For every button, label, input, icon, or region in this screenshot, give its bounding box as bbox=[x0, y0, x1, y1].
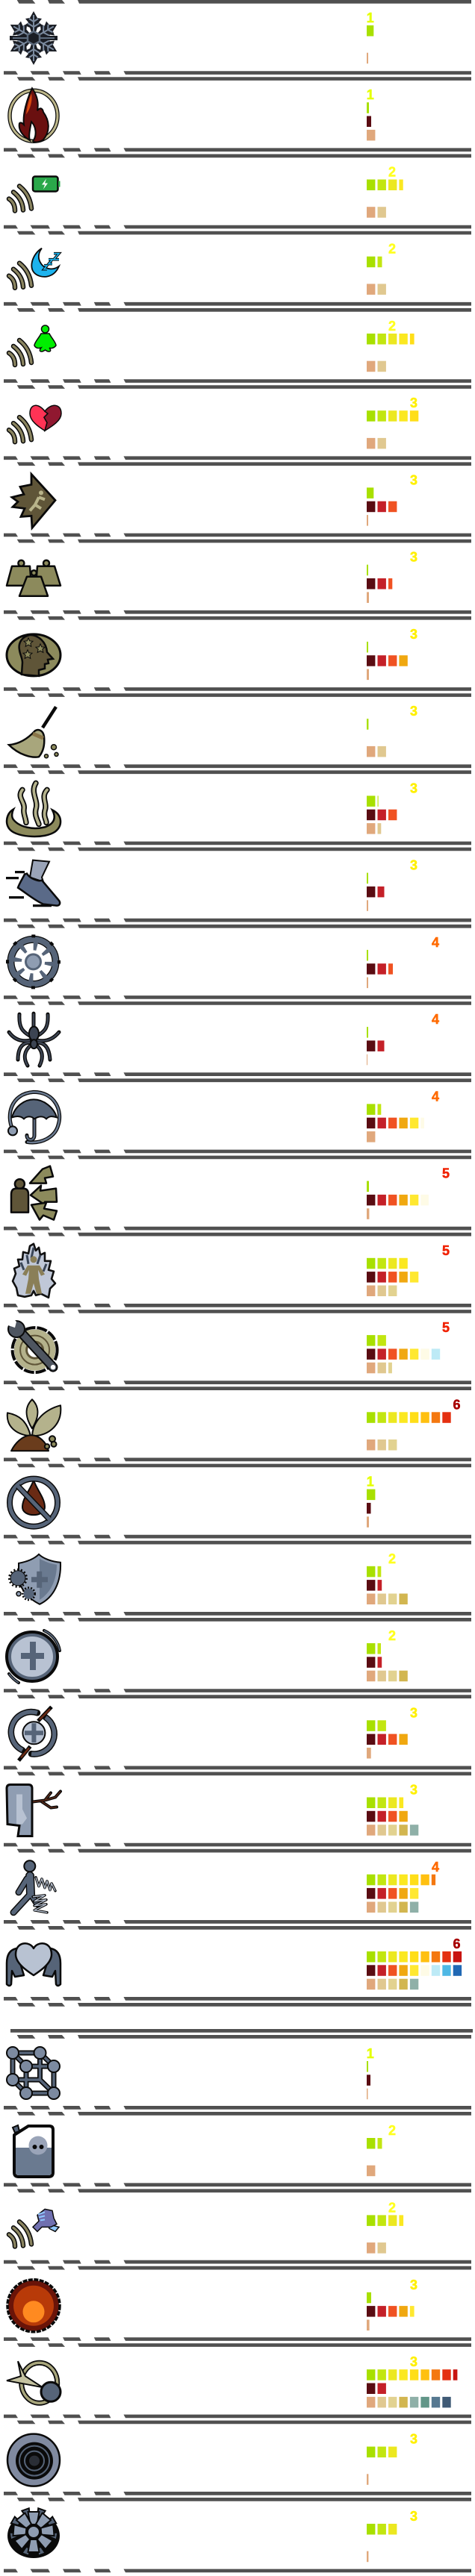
bar: heat bbox=[367, 887, 384, 897]
bar: green bbox=[367, 1104, 381, 1115]
rating number: 3 bbox=[410, 2432, 417, 2447]
bar: green bbox=[367, 1643, 381, 1654]
bar: tan bbox=[367, 1285, 397, 1296]
icon: flame in ring bbox=[10, 88, 58, 143]
row: umbrella bbox=[8, 1089, 439, 1142]
bar: heat bbox=[367, 1272, 418, 1283]
icon: broken heart signal bbox=[9, 405, 61, 442]
bar: green bbox=[367, 1412, 451, 1423]
icon: arrow and orbiting ball bbox=[7, 2361, 60, 2403]
bar: tan bbox=[367, 515, 368, 526]
rating number: 5 bbox=[442, 1320, 450, 1335]
rating number: 1 bbox=[367, 1475, 374, 1489]
row: spider bbox=[9, 1012, 439, 1066]
bar: tan bbox=[367, 2474, 368, 2485]
bar: green bbox=[367, 257, 382, 267]
row: poison can bbox=[13, 2123, 396, 2177]
bar: heat bbox=[367, 2383, 386, 2394]
bar: tan bbox=[367, 1208, 369, 1219]
bar: tan bbox=[367, 900, 368, 911]
bar: green bbox=[367, 2292, 371, 2303]
icon: battery signal bbox=[9, 176, 60, 210]
icon: plus coin bbox=[7, 1631, 60, 1683]
bar: tan bbox=[367, 1825, 418, 1836]
rating number: 6 bbox=[453, 1397, 461, 1412]
rating number: 5 bbox=[442, 1243, 450, 1258]
row: plus coin bbox=[7, 1628, 408, 1683]
bar: green bbox=[367, 873, 368, 884]
row: gear wheel bbox=[7, 935, 439, 988]
bar: green bbox=[367, 719, 368, 730]
bar: heat bbox=[367, 1195, 429, 1205]
bar: heat bbox=[367, 1888, 418, 1899]
icon: meditating figure signal bbox=[9, 325, 56, 365]
bar: green bbox=[367, 179, 403, 190]
icon: leaves on soil bbox=[7, 1399, 60, 1451]
bar: green bbox=[367, 334, 415, 345]
icon: gear wheel bbox=[7, 936, 59, 987]
rating number: 3 bbox=[410, 550, 417, 565]
row: fireball bbox=[7, 2278, 417, 2332]
bar: tan bbox=[367, 1594, 408, 1604]
bar: heat bbox=[367, 1965, 462, 1976]
row: arrow ring bbox=[7, 2354, 457, 2407]
row: flame ring bbox=[10, 87, 375, 143]
rating number: 5 bbox=[442, 1166, 450, 1181]
bar: green bbox=[367, 102, 369, 113]
rating number: 2 bbox=[388, 164, 396, 179]
bar: green bbox=[367, 2215, 403, 2226]
row: ring needle bbox=[11, 1705, 417, 1760]
bar: green bbox=[367, 1489, 375, 1500]
row: steam bbox=[7, 781, 417, 837]
icon: vortex bbox=[7, 2434, 60, 2487]
rating number: 4 bbox=[432, 1089, 439, 1104]
rating number: 1 bbox=[367, 10, 374, 25]
bar: green bbox=[367, 1258, 408, 1269]
icon: steam bowl bbox=[7, 783, 60, 837]
icon: molecular lattice bbox=[7, 2047, 60, 2099]
icon: snowflake bbox=[6, 11, 61, 65]
bar: tan bbox=[367, 1748, 371, 1758]
rating number: 2 bbox=[388, 1551, 396, 1566]
bar: tan bbox=[367, 1979, 418, 1989]
row: vortex bbox=[7, 2432, 417, 2487]
bar: green bbox=[367, 2524, 397, 2534]
icon: shield and germs bbox=[10, 1554, 60, 1604]
bar: heat bbox=[367, 501, 397, 512]
rating number: 3 bbox=[410, 704, 417, 719]
rating number: 1 bbox=[367, 2046, 374, 2061]
bar: heat bbox=[367, 1811, 408, 1822]
row: handshake bbox=[9, 2200, 403, 2254]
bar: tan bbox=[367, 1363, 392, 1373]
bar: tan bbox=[367, 1131, 375, 1142]
bar: green bbox=[367, 410, 418, 422]
rating number: 3 bbox=[410, 1782, 417, 1797]
bar: heat bbox=[367, 1118, 424, 1128]
rating number: 3 bbox=[410, 1705, 417, 1720]
bar: green bbox=[367, 1720, 386, 1731]
bar: heat bbox=[367, 1734, 408, 1745]
bar: tan bbox=[367, 2397, 451, 2407]
bar: heat bbox=[367, 810, 397, 820]
bar: tan bbox=[367, 1671, 408, 1681]
icon: wrench over gear bbox=[6, 1317, 58, 1372]
rating number: 2 bbox=[388, 1628, 396, 1643]
rating number: 3 bbox=[410, 2509, 417, 2524]
bar: green bbox=[367, 1335, 386, 1346]
row: meditation bbox=[9, 319, 415, 372]
bar: tan bbox=[367, 53, 368, 63]
bar: tan bbox=[367, 2551, 368, 2562]
rating number: 4 bbox=[432, 1860, 439, 1875]
row: battery bbox=[9, 164, 403, 218]
rating number: 2 bbox=[388, 2123, 396, 2138]
row: aura bbox=[13, 1243, 450, 1298]
bar: green bbox=[367, 2061, 368, 2072]
bar: green bbox=[367, 565, 368, 575]
bar: green bbox=[367, 487, 373, 498]
rating number: 4 bbox=[432, 1012, 439, 1027]
icon: head with stars bbox=[7, 634, 60, 676]
bar: heat bbox=[367, 578, 392, 590]
icon: cracked mirror bbox=[7, 1785, 60, 1836]
bar: tan bbox=[367, 130, 375, 140]
bar: green bbox=[367, 25, 373, 36]
bar: green bbox=[367, 1951, 462, 1963]
bar: green bbox=[367, 1027, 368, 1038]
row: petal wheel bbox=[7, 2508, 417, 2562]
row: lattice bbox=[7, 2046, 374, 2099]
icon: petal wheel bbox=[7, 2508, 60, 2558]
rating number: 3 bbox=[410, 627, 417, 642]
rating number: 2 bbox=[388, 319, 396, 334]
bar: tan bbox=[367, 1439, 397, 1451]
bar: tan bbox=[367, 207, 386, 218]
rating number: 3 bbox=[410, 2278, 417, 2292]
row: shield bbox=[10, 1551, 408, 1604]
row: no blood bbox=[10, 1475, 375, 1528]
icon: handshake signal bbox=[9, 2209, 59, 2246]
row: running shoe bbox=[6, 858, 417, 911]
bar: green bbox=[367, 642, 368, 652]
bar: heat bbox=[367, 1503, 370, 1513]
rating number: 3 bbox=[410, 781, 417, 795]
bar: tan bbox=[367, 978, 368, 988]
icon: spider bbox=[9, 1013, 59, 1066]
icon: umbrella ring bbox=[8, 1092, 60, 1142]
icon: running burst bbox=[12, 474, 55, 528]
bar: tan bbox=[367, 669, 369, 680]
rating number: 3 bbox=[410, 858, 417, 873]
bar: green bbox=[367, 2138, 382, 2149]
row: spring man bbox=[13, 1860, 439, 1913]
icon: fireball bbox=[7, 2280, 60, 2332]
bar: tan bbox=[367, 746, 386, 757]
bar: tan bbox=[367, 1516, 369, 1528]
bar: heat bbox=[367, 1580, 382, 1591]
icon: broom bbox=[9, 707, 58, 758]
bar: tan bbox=[367, 361, 386, 372]
bar: tan bbox=[367, 592, 369, 603]
bar: tan bbox=[367, 284, 386, 295]
bar: tan bbox=[367, 2242, 386, 2254]
bar: green bbox=[367, 2369, 457, 2380]
bar: heat bbox=[367, 2075, 370, 2086]
icon: pierced ring with plus bbox=[11, 1707, 55, 1760]
icon: running shoe bbox=[6, 860, 60, 906]
rating number: 6 bbox=[453, 1936, 461, 1951]
rating number: 3 bbox=[410, 472, 417, 487]
icon: winged heart bbox=[7, 1943, 60, 1986]
bar: green bbox=[367, 1875, 435, 1885]
bar: tan bbox=[367, 823, 381, 834]
bar: green bbox=[367, 1566, 381, 1577]
rating number: 2 bbox=[388, 2200, 396, 2215]
icon: powered-up aura bbox=[13, 1244, 55, 1298]
bar: tan bbox=[367, 438, 386, 448]
row: deflecting arrows bbox=[11, 1166, 450, 1220]
rating number: 2 bbox=[388, 242, 396, 257]
row: broom bbox=[9, 704, 417, 758]
icon: jerry can with skull bbox=[13, 2125, 53, 2177]
bar: tan bbox=[367, 1901, 418, 1913]
bar: green bbox=[367, 2447, 397, 2457]
row: winged heart bbox=[7, 1936, 462, 1989]
rating number: 3 bbox=[410, 396, 417, 410]
bar: heat bbox=[367, 1657, 382, 1668]
bar: tan bbox=[367, 2319, 370, 2330]
icon: three weights bbox=[7, 560, 60, 596]
bar: green bbox=[367, 795, 379, 807]
rating number: 3 bbox=[410, 2354, 417, 2369]
rating number: 4 bbox=[432, 935, 439, 950]
bar: heat bbox=[367, 1348, 440, 1360]
row: weights bbox=[7, 550, 417, 603]
bar: green bbox=[367, 1797, 403, 1808]
row: sleeping moon bbox=[9, 242, 396, 295]
rating number: 1 bbox=[367, 87, 374, 102]
row: dazed head bbox=[7, 627, 417, 680]
bar: heat bbox=[367, 2306, 415, 2317]
bar: green bbox=[367, 1181, 369, 1192]
icon: moon signal bbox=[9, 248, 59, 288]
row: wrench and gear bbox=[6, 1317, 450, 1373]
row: running burst bbox=[12, 472, 417, 528]
row: broken heart bbox=[9, 396, 418, 448]
bar: heat bbox=[367, 963, 393, 975]
row: sprouting plant bbox=[7, 1397, 461, 1451]
row: snowflake bbox=[6, 10, 374, 65]
bar: green bbox=[367, 950, 368, 960]
bar: tan bbox=[367, 2166, 375, 2176]
icon: figure with arrows bbox=[11, 1166, 57, 1220]
icon: walking figure with springs bbox=[13, 1860, 55, 1913]
row: mirror bbox=[7, 1782, 418, 1836]
bar: heat bbox=[367, 1040, 384, 1051]
bar: heat bbox=[367, 655, 408, 666]
icon: crossed-out blood drop bbox=[10, 1479, 58, 1527]
bar: heat bbox=[367, 116, 371, 127]
